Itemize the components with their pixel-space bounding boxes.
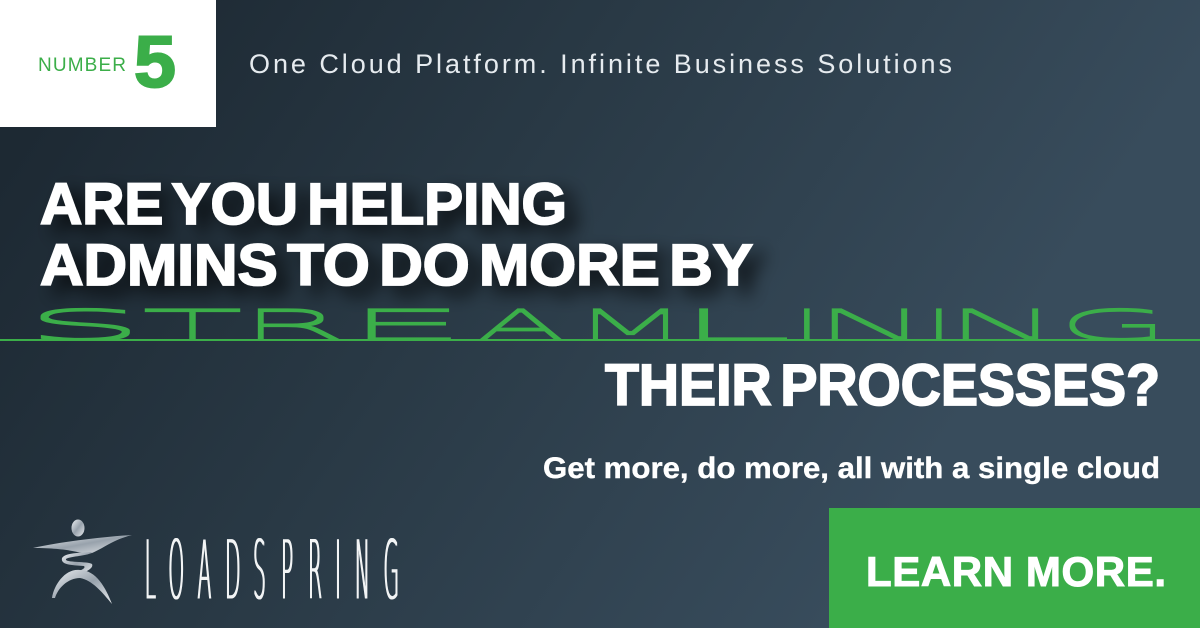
heading: streamlining wordmark: A [475,301,567,350]
logo: loadspring [33,520,399,618]
badge: number 5: NUMBER [38,55,126,76]
heading: question lines [40,172,753,298]
heading: streamlining wordmark: R [237,301,349,350]
heading: streamlining wordmark: E [342,301,470,350]
heading: streamlining wordmark: M [569,301,692,350]
tagline: One Cloud Platform. Infinite Business Solutions [249,49,952,79]
heading: streamlining wordmark: N [811,301,933,350]
divider line [0,339,1200,341]
icon: figure [33,520,132,604]
heading: streamlining wordmark: T [140,301,245,350]
heading: question lines: ADMINS TO DO MORE BY [40,233,753,298]
badge: number 5: 5 [134,22,176,103]
heading: streamlining wordmark: N [942,301,1064,350]
badge: number 5 [0,0,216,127]
heading: streamlining wordmark: S [22,301,147,350]
heading: streamlining wordmark: I [785,301,829,350]
logo wordmark: LOADSPRING [145,523,399,618]
heading: streamlining wordmark [40,308,1156,339]
heading: question lines: ARE YOU HELPING [40,172,567,237]
button: learn more [829,508,1200,628]
heading: streamlining wordmark: L [671,301,795,350]
subheading: Get more, do more, all with a single cloud [543,452,1160,485]
heading: streamlining wordmark: G [1056,301,1172,350]
button: learn more: LEARN MORE. [866,548,1166,595]
heading: their processes: THEIR PROCESSES? [605,353,1160,418]
heading: streamlining wordmark: I [917,301,961,350]
